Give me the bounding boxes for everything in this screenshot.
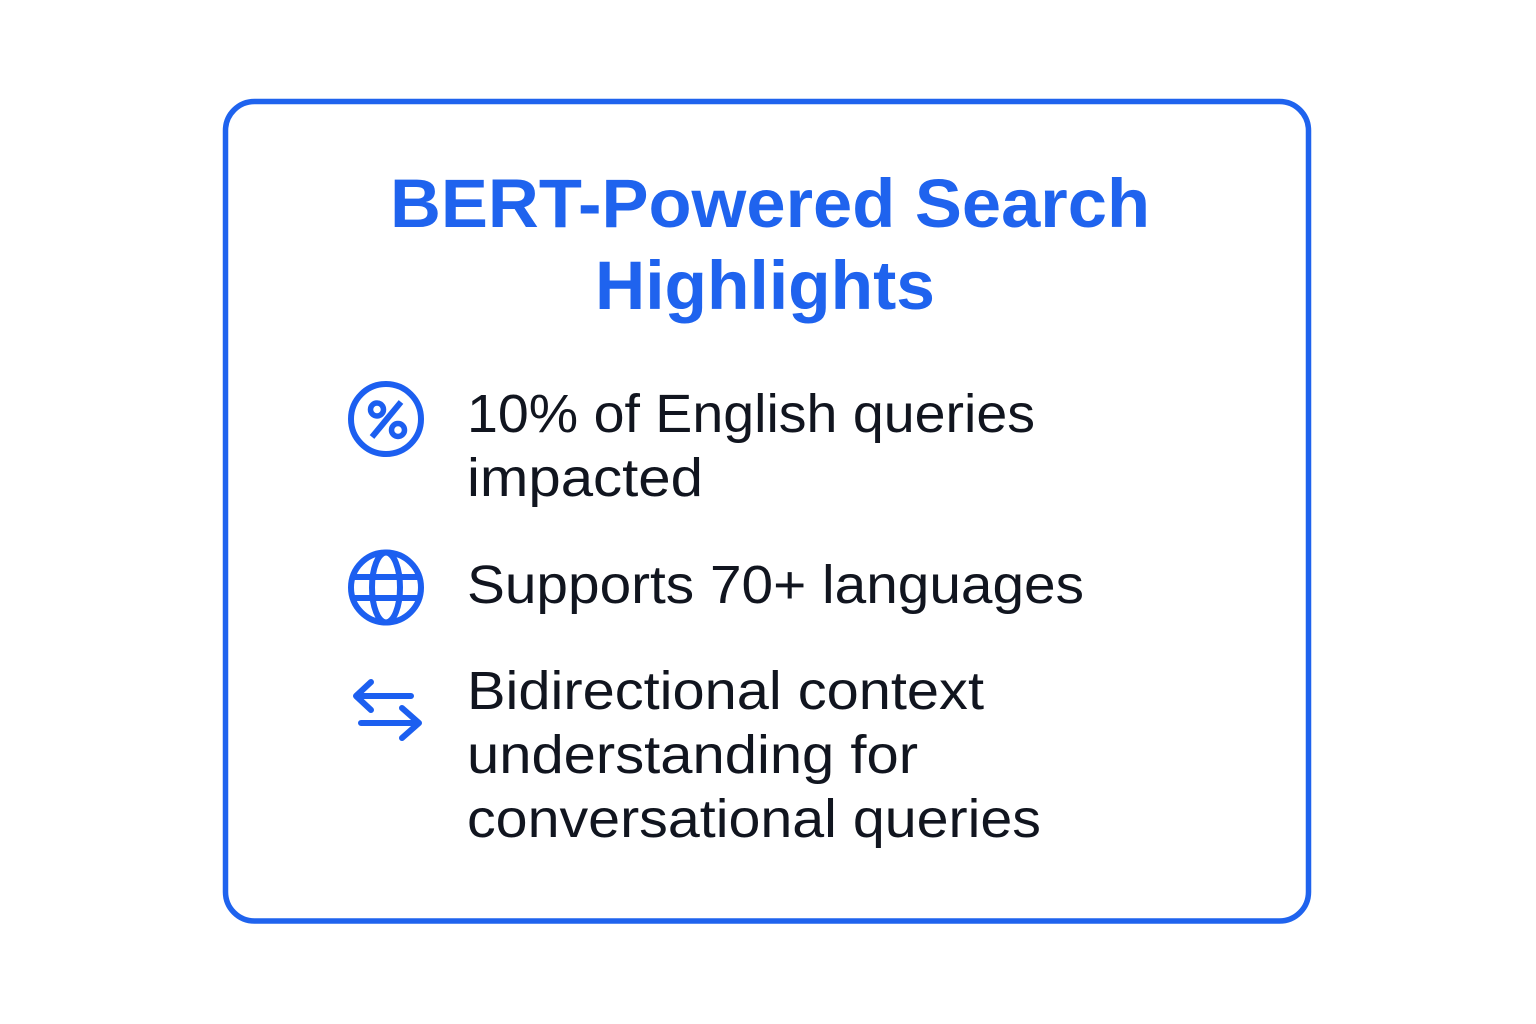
icon: percent: [351, 384, 421, 454]
icon: globe: [351, 552, 421, 622]
text: bidirectional context: conversational queries: [467, 789, 1041, 849]
text: bidirectional context: [467, 661, 1041, 849]
title: Highlights: [595, 247, 935, 324]
icon: bidirectional arrows: [356, 682, 419, 738]
text: supported languages: Supports 70+ languages: [467, 555, 1084, 615]
title: BERT-Powered Search: [390, 165, 1150, 242]
text: English queries impacted: 10% of English queries: [467, 384, 1035, 444]
title: [390, 165, 1150, 324]
text: English queries impacted: [467, 384, 1035, 508]
text: English queries impacted: impacted: [467, 448, 703, 508]
text: bidirectional context: understanding for: [467, 725, 918, 785]
panel: highlights card: [226, 102, 1308, 921]
text: bidirectional context: Bidirectional context: [467, 661, 984, 721]
